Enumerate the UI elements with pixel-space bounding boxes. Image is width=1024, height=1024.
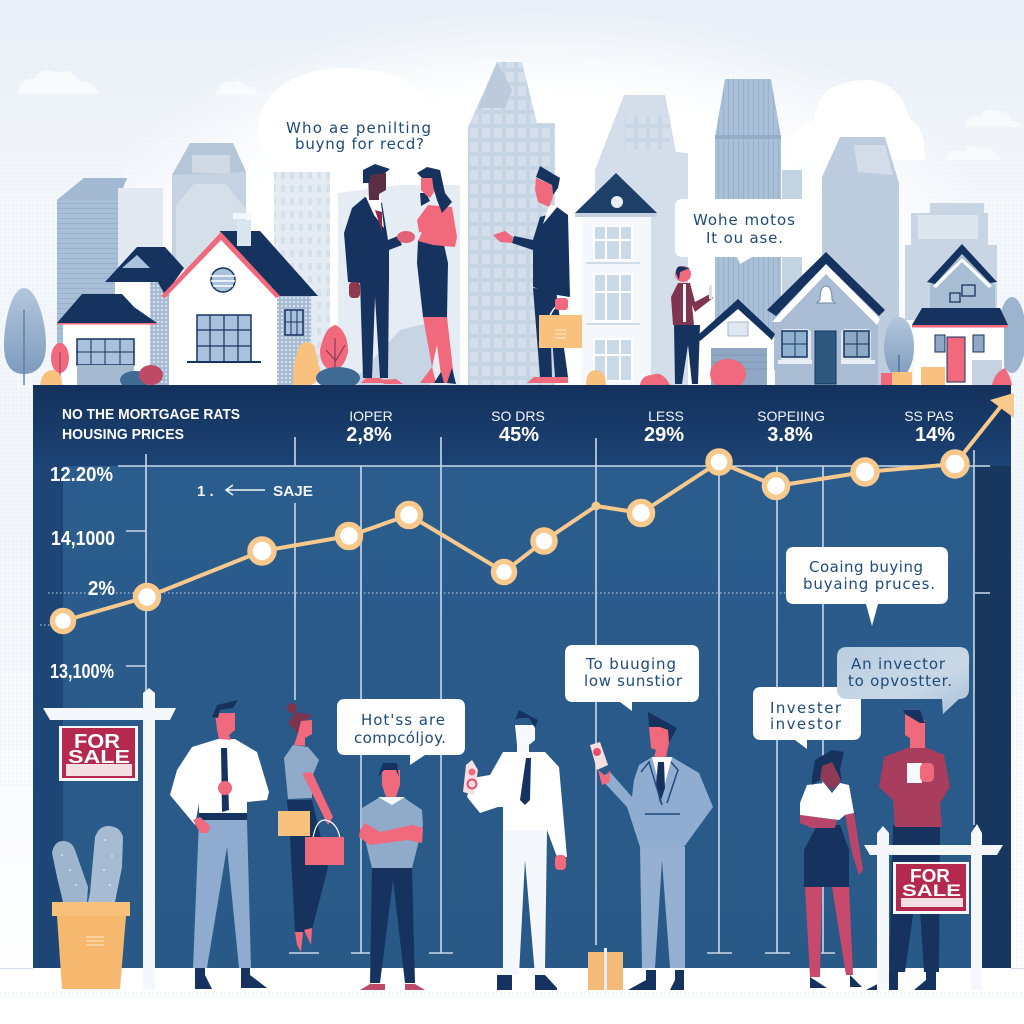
woman in white top and navy skirt xyxy=(800,750,863,988)
column stat: so drs: SO DRS xyxy=(491,408,545,424)
houses left group xyxy=(4,213,360,389)
speech bubble: an investor xyxy=(837,647,969,714)
building: pale window tower xyxy=(274,172,330,372)
speech bubble: to buying xyxy=(565,645,699,711)
building: gray block xyxy=(172,143,246,270)
tree left xyxy=(4,288,46,385)
for sale sign right xyxy=(864,824,1003,990)
icon: orange bag xyxy=(539,298,582,348)
column stat: sopeiing: 3.8% xyxy=(767,424,813,446)
hands clasped xyxy=(397,231,415,243)
small bushes middle xyxy=(586,370,670,385)
speech bubble: investor: Invester xyxy=(770,699,842,717)
icon: red price tag xyxy=(463,760,478,795)
header band xyxy=(33,385,1011,466)
building: far right block xyxy=(905,203,997,320)
boy with crossed arms xyxy=(359,763,425,990)
side window xyxy=(285,310,303,335)
trend arrow head xyxy=(990,393,1014,418)
column stat: sopeiing: SOPEIING xyxy=(757,408,825,424)
plot area xyxy=(63,466,974,968)
city skyline xyxy=(57,62,997,385)
y axis labels: 2% xyxy=(88,578,115,600)
bushes xyxy=(40,325,360,389)
front windows xyxy=(781,329,871,362)
main window xyxy=(187,315,261,363)
building: gray tower xyxy=(595,95,688,385)
man in maroon sweater xyxy=(866,710,950,990)
houses right group xyxy=(697,244,1024,389)
icon: bell xyxy=(817,286,835,303)
blue gabled house xyxy=(767,252,885,385)
legend: sale arrow: 1 . xyxy=(197,483,214,500)
house: back small xyxy=(105,247,184,385)
man in all white holding tag xyxy=(463,710,567,990)
small parcel xyxy=(588,948,623,990)
column stat: less: 29% xyxy=(644,424,684,446)
speech bubble: homes competitive: Hot'ss are xyxy=(361,711,445,729)
building: right gray tower xyxy=(822,137,899,385)
for sale sign left xyxy=(43,688,176,990)
column stat: ss pas: SS PAS xyxy=(904,408,954,424)
column stat: ioper xyxy=(346,408,393,446)
panel background xyxy=(33,385,1011,968)
column stat: less xyxy=(644,408,684,446)
data points xyxy=(52,451,967,632)
y axis labels: 12.20% xyxy=(50,464,113,486)
speech bubble: to buying: low sunstior xyxy=(584,672,683,690)
speech bubble: buying prices: Coaing buying xyxy=(809,558,923,576)
y axis labels: 13,100% xyxy=(50,661,114,683)
woman in pink top xyxy=(417,167,457,384)
speech cloud: couple question xyxy=(258,68,446,170)
speech bubble: an investor: An invector xyxy=(851,655,946,673)
legend: sale arrow: SAJE xyxy=(273,483,313,500)
potted cactus xyxy=(52,826,130,989)
speech bubble: homes competitive: compcóljoy. xyxy=(354,729,446,747)
panel title xyxy=(62,406,240,443)
speech bubble: investor: investor xyxy=(770,715,842,733)
tall white townhouse xyxy=(575,173,657,385)
column stat: so drs xyxy=(491,408,545,446)
man in gray suit xyxy=(590,712,713,990)
sign board: FOR xyxy=(74,731,121,753)
chart panel xyxy=(33,385,1014,968)
pink bag xyxy=(305,820,344,865)
panel title: NO THE MORTGAGE RATS xyxy=(62,406,240,423)
door xyxy=(815,331,836,384)
speech bubble: buying prices xyxy=(786,547,948,626)
person with keys xyxy=(671,266,713,384)
speech bubble: homes competitive xyxy=(337,699,465,765)
house: main white xyxy=(161,213,318,385)
sign board: SALE xyxy=(902,881,961,900)
chart grid xyxy=(40,437,990,953)
legend: sale arrow xyxy=(197,483,313,500)
column stat: sopeiing xyxy=(757,408,825,446)
line chart xyxy=(52,393,1014,632)
speech cloud: couple question: Who ae penilting xyxy=(286,119,431,137)
speech bubble: who moves: It ou ase. xyxy=(706,229,783,247)
speech bubble: to buying: To buuging xyxy=(585,655,676,673)
speech bubble: who moves xyxy=(675,199,813,264)
small accents xyxy=(881,372,912,385)
sign board: SALE xyxy=(68,747,130,767)
sign board: FOR xyxy=(910,866,950,886)
man with briefcase xyxy=(493,166,582,383)
garage house xyxy=(697,299,775,389)
orange package xyxy=(278,811,310,836)
column stat: ss pas xyxy=(904,408,955,446)
building: striped left tower xyxy=(57,178,163,372)
building: tall glass tower xyxy=(468,62,555,385)
sign board xyxy=(59,726,138,781)
speech bubble: an investor: to opvostter. xyxy=(848,672,952,690)
building: blue tower xyxy=(715,79,802,370)
y axis labels: 14,1000 xyxy=(51,528,115,550)
speech bubble: investor xyxy=(753,687,861,749)
column stat: less: LESS xyxy=(648,408,684,424)
ground xyxy=(0,968,1024,1024)
speech cloud: couple question: buyng for recd? xyxy=(295,135,424,153)
panel title: HOUSING PRICES xyxy=(62,426,184,443)
column stat: ioper: IOPER xyxy=(349,408,393,424)
chimney xyxy=(233,213,252,246)
right house xyxy=(912,244,1024,385)
man with white shirt and tie xyxy=(170,700,269,989)
speech bubble: who moves: Wohe motos xyxy=(693,211,795,229)
clouds xyxy=(18,71,1024,160)
man in dark suit xyxy=(344,164,403,384)
tree xyxy=(884,317,914,385)
y axis labels xyxy=(50,464,115,683)
townhouse windows xyxy=(594,226,632,381)
couple shaking hands xyxy=(344,164,457,384)
column stat: ss pas: 14% xyxy=(915,424,955,446)
icon: red price tag xyxy=(590,742,608,770)
woman with shopping bags xyxy=(278,703,344,952)
speech bubble: buying prices: buyaing pruces. xyxy=(803,575,935,593)
sign board xyxy=(893,862,969,914)
column stat: ioper: 2,8% xyxy=(346,424,392,446)
round vent xyxy=(211,268,235,292)
column stat: so drs: 45% xyxy=(499,424,539,446)
building: pale backdrop behind couple xyxy=(338,185,460,385)
house: garage left xyxy=(57,294,157,385)
